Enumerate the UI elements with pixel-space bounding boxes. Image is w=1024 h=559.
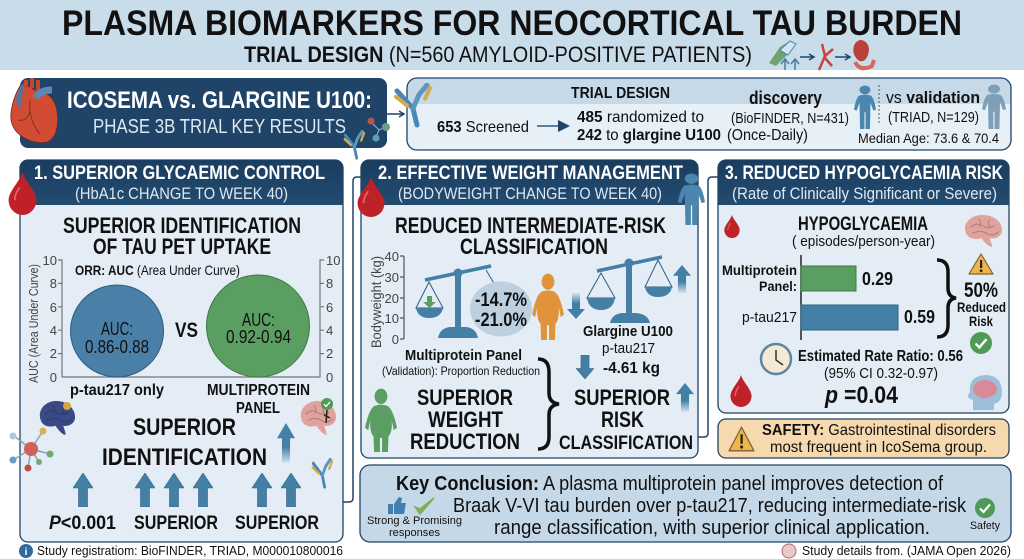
chart: AUC circles: MULTIPROTEIN bbox=[207, 382, 310, 399]
heading bbox=[395, 213, 666, 259]
heading: OF TAU PET UPTAKE bbox=[93, 234, 271, 259]
panel 2 header bbox=[361, 160, 698, 205]
label: multiprotein: Multiprotein Panel bbox=[405, 347, 522, 364]
arrows row bbox=[73, 473, 301, 507]
arrow: up bbox=[673, 265, 691, 293]
divider bbox=[878, 85, 880, 125]
panel 2 header: (BODYWEIGHT CHANGE TO WEEK 40) bbox=[398, 184, 662, 203]
rate ratio: p =0.04 bbox=[824, 382, 899, 409]
panel: trial design bbox=[407, 78, 1011, 150]
significance labels: P<0.001 bbox=[49, 513, 116, 534]
panel 1 header: (HbA1c CHANGE TO WEEK 40) bbox=[75, 184, 288, 203]
chart: AUC circles: 10 bbox=[43, 253, 57, 268]
chart: AUC circles: 0 bbox=[50, 370, 57, 385]
icon: warning bbox=[969, 254, 993, 274]
label: promising bbox=[367, 515, 462, 539]
icon: blood drop bbox=[358, 177, 384, 217]
footer: study registration: i bbox=[25, 547, 28, 558]
axis: bodyweight bbox=[368, 249, 404, 348]
chart: AUC circles: VS bbox=[175, 319, 198, 342]
chart: AUC circles: 8 bbox=[326, 276, 333, 291]
arrow head bbox=[558, 120, 570, 132]
brace bbox=[538, 359, 559, 449]
axis: bodyweight: 10 bbox=[385, 311, 399, 326]
heading: trial design: TRIAL DESIGN bbox=[571, 85, 670, 102]
callout: safety: SAFETY: Gastrointestinal disorders bbox=[762, 422, 996, 439]
discovery: discovery bbox=[749, 88, 822, 108]
icon: thumb and check bbox=[388, 497, 434, 514]
chart: AUC circles: 6 bbox=[326, 300, 333, 315]
superior weight reduction: REDUCTION bbox=[410, 429, 520, 454]
superior weight reduction bbox=[410, 385, 520, 454]
significance labels: SUPERIOR bbox=[235, 513, 319, 534]
chart: AUC circles: ORR: AUC (Area Under Curve) bbox=[75, 262, 240, 278]
superior identification: SUPERIOR bbox=[133, 414, 236, 441]
heading bbox=[792, 214, 935, 250]
heading bbox=[63, 213, 301, 259]
label: promising: Strong & Promising bbox=[367, 515, 462, 527]
footer: study details: Study details from. (JAMA Open 2026) bbox=[802, 543, 1011, 558]
50 percent reduced risk: Reduced bbox=[957, 299, 1006, 315]
icon: drop bbox=[730, 375, 752, 407]
panel 1 header bbox=[20, 160, 343, 205]
label: multiprotein: (Validation): Proportion Reduction bbox=[382, 364, 540, 378]
label: glargine: -4.61 kg bbox=[603, 360, 660, 377]
triad: (TRIAD, N=129) bbox=[888, 109, 979, 126]
once daily: (Once-Daily) bbox=[727, 127, 808, 144]
brace bbox=[937, 260, 956, 337]
callout: reduction values: -21.0% bbox=[475, 310, 527, 331]
title: PLASMA BIOMARKERS FOR NEOCORTICAL TAU BURDEN bbox=[62, 4, 962, 43]
conclusion text: range classification, with superior clinical application. bbox=[494, 517, 930, 539]
icon: person validation bbox=[982, 84, 1006, 129]
glargine: 242 to glargine U100 bbox=[577, 127, 721, 144]
significance labels: SUPERIOR bbox=[134, 513, 218, 534]
chart: AUC circles: AUC: bbox=[101, 319, 133, 339]
callout: safety bbox=[718, 419, 1009, 458]
panel: key conclusion bbox=[360, 465, 1011, 542]
icon: orange person bbox=[532, 274, 564, 340]
connector bbox=[343, 177, 361, 502]
label: glargine: p-tau217 bbox=[602, 340, 655, 357]
axis: bodyweight: 40 bbox=[385, 249, 399, 264]
chart: AUC circles: 8 bbox=[50, 276, 57, 291]
randomized: 485 randomized to bbox=[577, 109, 704, 126]
icon: scale right bbox=[587, 257, 672, 323]
icon: vial to artery to stomach pathway bbox=[769, 40, 874, 70]
axis: bodyweight: 0 bbox=[392, 332, 399, 347]
heading: ( episodes/person-year) bbox=[792, 233, 935, 250]
bar chart: Multiprotein bbox=[722, 262, 797, 278]
superior weight reduction: SUPERIOR bbox=[417, 385, 513, 410]
chart: AUC circles: 2 bbox=[50, 346, 57, 361]
axis: bodyweight: Bodyweight (kg) bbox=[368, 256, 384, 348]
heading: SUPERIOR IDENTIFICATION bbox=[63, 213, 301, 238]
panel 3: hypoglycaemia bbox=[718, 160, 1009, 413]
icon: brain bbox=[965, 215, 1002, 247]
icon: person bbox=[678, 174, 705, 225]
conclusion text: Key Conclusion: A plasma multiprotein panel improves detection of bbox=[396, 473, 943, 495]
axis: bodyweight: 30 bbox=[385, 270, 399, 285]
rate ratio: Estimated Rate Ratio: 0.56 bbox=[798, 348, 963, 365]
chart: AUC circles: 10 bbox=[326, 253, 340, 268]
bar chart: 0.29 bbox=[862, 269, 893, 289]
panel 1: glycaemic control bbox=[10, 160, 343, 542]
heading: REDUCED INTERMEDIATE-RISK bbox=[395, 213, 666, 238]
superior identification: IDENTIFICATION bbox=[102, 444, 267, 471]
arrow: tall bbox=[277, 423, 295, 463]
label: glargine: Glargine U100 bbox=[583, 323, 673, 340]
icon: head with brain bbox=[968, 375, 1002, 410]
title band bbox=[0, 0, 1024, 70]
subtitle: TRIAL DESIGN (N=560 AMYLOID-POSITIVE PATIENTS) bbox=[244, 42, 752, 67]
banner: Icosema vs Glargine: PHASE 3B TRIAL KEY RESULTS bbox=[93, 116, 346, 138]
label: promising: responses bbox=[389, 527, 440, 539]
superior identification bbox=[102, 414, 267, 471]
connector bbox=[698, 177, 718, 437]
validation: vs validation bbox=[886, 88, 980, 107]
label: multiprotein bbox=[382, 347, 540, 378]
icon: brain pink with check bbox=[301, 398, 336, 435]
chart: AUC circles: AUC: bbox=[242, 310, 275, 330]
banner: Icosema vs Glargine: ICOSEMA vs. GLARGINE U100: bbox=[67, 87, 372, 114]
panel 3 header bbox=[718, 160, 1009, 205]
superior weight reduction: WEIGHT bbox=[428, 407, 503, 432]
rate ratio bbox=[798, 348, 963, 409]
superior risk classification: SUPERIOR bbox=[574, 385, 670, 410]
label: glargine bbox=[583, 323, 673, 377]
heading: CLASSIFICATION bbox=[460, 234, 608, 259]
superior risk classification: RISK bbox=[601, 407, 644, 432]
50 percent reduced risk: 50% bbox=[964, 279, 998, 302]
chart: AUC circles: 4 bbox=[50, 323, 57, 338]
chart: AUC circles: AUC (Area Under Curve) bbox=[26, 264, 41, 383]
heading: HYPOGLYCAEMIA bbox=[798, 214, 928, 235]
icon: drop bbox=[724, 215, 740, 238]
bar chart: Panel: bbox=[759, 278, 797, 294]
label: safety: Safety bbox=[970, 520, 1000, 532]
chart: AUC circles bbox=[26, 253, 340, 417]
bar chart bbox=[722, 255, 935, 340]
arrow: down bbox=[576, 355, 594, 379]
conclusion text: Braak V-VI tau burden over p-tau217, reducing intermediate-risk bbox=[453, 495, 967, 517]
bar chart: 0.59 bbox=[904, 307, 935, 327]
icon: person discovery bbox=[854, 85, 876, 129]
callout: safety: most frequent in IcoSema group. bbox=[770, 439, 987, 456]
axis: bodyweight: 20 bbox=[385, 291, 399, 306]
icon: molecule and antibody on banner bbox=[345, 118, 390, 158]
icon: brain navy bbox=[40, 401, 75, 435]
significance labels bbox=[49, 513, 319, 534]
panel 3 header: (Rate of Clinically Significant or Severe) bbox=[732, 184, 997, 203]
icon: clock bbox=[761, 344, 791, 374]
icon: heart bbox=[11, 78, 58, 142]
panel 2 header: 2. EFFECTIVE WEIGHT MANAGEMENT bbox=[378, 163, 683, 184]
icon: safety check bbox=[975, 498, 995, 518]
screened: 653 Screened bbox=[437, 119, 529, 136]
footer: study registration: Study registratiom: BioFINDER, TRIAD, M000010800016 bbox=[37, 543, 343, 558]
chart: AUC circles: 2 bbox=[326, 346, 333, 361]
arrow: up bbox=[676, 383, 694, 412]
conclusion text bbox=[396, 473, 967, 539]
arrow bbox=[537, 125, 558, 127]
superior risk classification bbox=[559, 385, 693, 454]
panel 2: weight management bbox=[361, 160, 698, 458]
icon: molecule bbox=[10, 428, 54, 472]
biofinder: (BioFINDER, N=431) bbox=[731, 110, 849, 127]
rate ratio: (95% CI 0.32-0.97) bbox=[824, 365, 938, 382]
arrow: down bbox=[567, 293, 585, 319]
callout: reduction values bbox=[470, 282, 532, 336]
50 percent reduced risk: Risk bbox=[969, 313, 993, 329]
50 percent reduced risk bbox=[957, 279, 1006, 329]
icon: antibody right bbox=[313, 459, 332, 487]
callout: reduction values: -14.7% bbox=[475, 290, 527, 311]
median age: Median Age: 73.6 & 70.4 bbox=[858, 130, 999, 146]
chart: AUC circles: 0.86-0.88 bbox=[85, 337, 149, 357]
icon: blood drop bbox=[9, 172, 36, 215]
icon: antibody bbox=[396, 85, 430, 125]
icon: scale left bbox=[416, 266, 495, 338]
icon: green person bbox=[365, 389, 397, 452]
chart: AUC circles: 4 bbox=[326, 323, 333, 338]
icon: check bbox=[970, 332, 992, 354]
panel 1 header: 1. SUPERIOR GLYCAEMIC CONTROL bbox=[34, 163, 325, 184]
connector arrow bbox=[387, 111, 404, 117]
chart: AUC circles: 0.92-0.94 bbox=[226, 327, 291, 347]
chart: AUC circles: p-tau217 only bbox=[70, 382, 164, 399]
banner: Icosema vs Glargine bbox=[20, 78, 387, 148]
superior risk classification: CLASSIFICATION bbox=[559, 433, 693, 454]
chart: AUC circles: PANEL bbox=[236, 400, 280, 417]
chart: AUC circles: 6 bbox=[50, 300, 57, 315]
chart: AUC circles: 0 bbox=[326, 370, 333, 385]
bar chart: p-tau217 bbox=[742, 309, 797, 326]
